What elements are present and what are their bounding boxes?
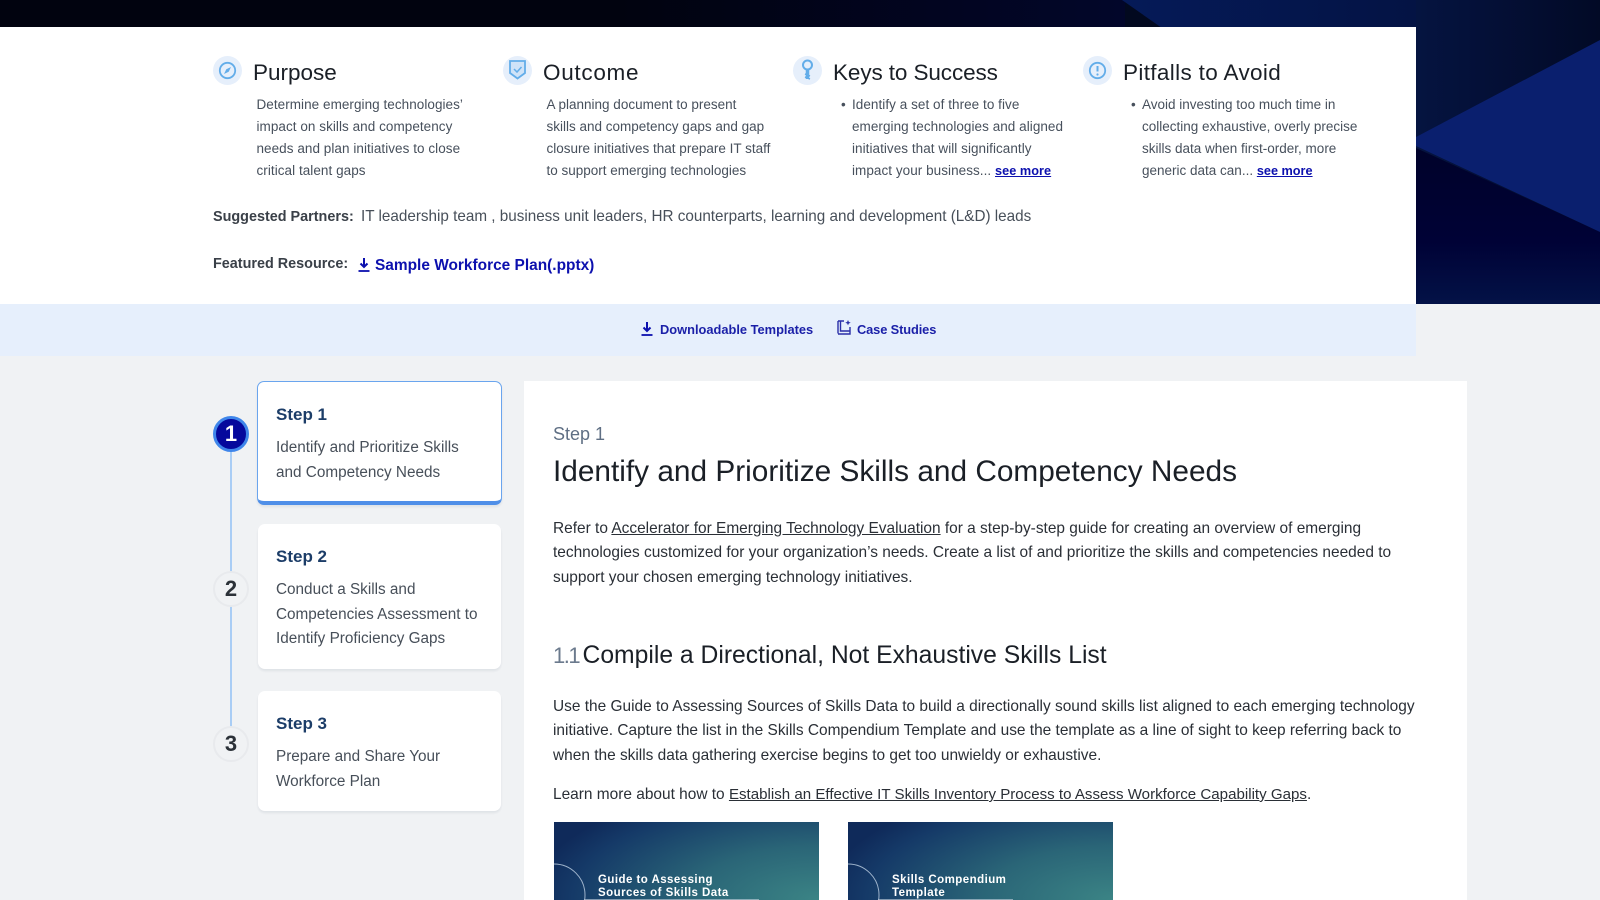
bullet text: Pitfalls to Avoid: skills data when first-order, more — [1142, 141, 1336, 156]
column: Pitfalls to Avoid: • — [1131, 97, 1136, 112]
icon: shield — [503, 56, 532, 85]
featured resource: Sample Workforce Plan(.pptx) — [375, 256, 594, 274]
subheading 1.1: Compile a Directional, Not Exhaustive Skills List — [582, 642, 1107, 668]
step number 3: 3 — [225, 731, 237, 756]
card: step 2 — [258, 524, 501, 669]
column: Keys to Success: • — [841, 97, 846, 112]
thumbnail title: Template — [892, 886, 945, 898]
step 2 description: Conduct a Skills and — [276, 581, 415, 598]
bullet text: Pitfalls to Avoid: collecting exhaustive, overly precise — [1142, 119, 1357, 134]
intro paragraph: technologies customized for your organization’s needs. Create a list of and prioritize the skills and competencies needed to — [553, 544, 1391, 561]
bullet text: Keys to Success: emerging technologies and aligned — [852, 119, 1063, 134]
heading: Purpose: Purpose — [253, 60, 337, 85]
featured resource — [213, 256, 594, 274]
icon: alert — [1083, 56, 1112, 85]
text: Outcome: to support emerging technologies — [546, 163, 746, 178]
step 2 label: Step 2 — [276, 547, 327, 566]
text: Outcome: closure initiatives that prepare IT staff — [546, 141, 770, 156]
intro paragraph: Refer to Accelerator for Emerging Technology Evaluation for a step-by-step guide for creating an overview of emerging — [553, 520, 1361, 536]
step number 1: 1 — [225, 421, 237, 446]
column: Pitfalls to Avoid — [1083, 56, 1357, 178]
text: Purpose: needs and plan initiatives to close — [256, 141, 460, 156]
thumbnail: Skills Compendium Template — [848, 822, 1113, 900]
action band — [0, 304, 1416, 356]
featured resource: Featured Resource: — [213, 256, 348, 272]
main title: Identify and Prioritize Skills and Competency Needs — [553, 455, 1237, 488]
text: Outcome — [546, 97, 770, 178]
heading: Outcome: Outcome — [543, 60, 639, 85]
step 1 description: and Competency Needs — [276, 464, 440, 481]
heading: Keys to Success: Keys to Success — [833, 60, 998, 85]
step 3 label: Step 3 — [276, 714, 327, 733]
link: Case Studies: Case Studies — [857, 322, 936, 337]
text: Outcome: skills and competency gaps and gap — [546, 119, 764, 134]
suggested partners: Suggested Partners: — [213, 209, 354, 225]
thumbnail title: Sources of Skills Data — [598, 886, 729, 898]
bullet text: Pitfalls to Avoid: generic data can... see more — [1142, 163, 1313, 178]
text: Purpose: impact on skills and competency — [256, 119, 452, 134]
body paragraph: when the skills data gathering exercise begins to get too unwieldy or exhaustive. — [553, 747, 1101, 764]
thumbnail: Guide to Assessing Sources of Skills Data — [554, 822, 819, 900]
text: Outcome: A planning document to present — [546, 97, 736, 112]
bullet text: Keys to Success: initiatives that will significantly — [852, 141, 1032, 156]
body paragraph: initiative. Capture the list in the Skills Compendium Template and use the template as a line of sight to keep referring back to — [553, 722, 1401, 739]
heading: Pitfalls to Avoid: Pitfalls to Avoid — [1123, 60, 1281, 85]
bullet text: Pitfalls to Avoid: Avoid investing too much time in — [1142, 97, 1335, 112]
step 3 description — [276, 748, 440, 790]
column: Outcome — [503, 56, 770, 178]
bullet text: Keys to Success: Identify a set of three to five — [852, 97, 1019, 112]
suggested partners: IT leadership team , business unit leaders, HR counterparts, learning and development (L&D) leads — [361, 208, 1031, 225]
step 2 description — [276, 581, 478, 647]
bullet text: Keys to Success — [841, 97, 1063, 178]
step number 2 — [213, 571, 249, 607]
icon: key — [793, 56, 822, 85]
body paragraph — [553, 698, 1415, 764]
card: step 3 — [258, 691, 501, 811]
header background — [0, 0, 1600, 304]
column: Purpose — [213, 56, 463, 178]
main content panel — [524, 381, 1467, 900]
thumbnail title — [598, 874, 729, 898]
step timeline — [230, 452, 232, 726]
step 2 description: Competencies Assessment to — [276, 606, 478, 623]
step 1 description — [276, 439, 459, 481]
column: Keys to Success — [793, 56, 1063, 178]
bullet text: Keys to Success: impact your business... see more — [852, 163, 1051, 178]
step 1 label: Step 1 — [276, 405, 327, 424]
step number 3 — [213, 726, 249, 762]
connector line — [230, 431, 232, 741]
bullet text: Pitfalls to Avoid — [1131, 97, 1357, 178]
link: Downloadable Templates: Downloadable Templates — [660, 322, 813, 337]
step 2 description: Identify Proficiency Gaps — [276, 630, 445, 647]
subheading 1.1: 1.1 — [553, 642, 579, 668]
step 1 description: Identify and Prioritize Skills — [276, 439, 459, 456]
step number 1 — [213, 416, 249, 452]
step eyebrow: Step 1 — [553, 424, 605, 444]
icon: compass — [213, 56, 242, 85]
text: Purpose: critical talent gaps — [256, 163, 366, 178]
step number 2: 2 — [225, 576, 237, 601]
thumbnail title: Guide to Assessing — [598, 874, 713, 886]
text: Purpose — [256, 97, 463, 178]
intro paragraph — [553, 520, 1391, 586]
step 3 description: Prepare and Share Your — [276, 748, 440, 765]
card: step 1 — [257, 381, 502, 505]
learn more line: Learn more about how to Establish an Effective IT Skills Inventory Process to Assess Workforce Capability Gaps. — [553, 786, 1311, 803]
body paragraph: Use the Guide to Assessing Sources of Skills Data to build a directionally sound skills list aligned to each emerging technology — [553, 698, 1415, 714]
step 3 description: Workforce Plan — [276, 773, 380, 790]
intro paragraph: support your chosen emerging technology initiatives. — [553, 569, 913, 586]
thumbnail title: Skills Compendium — [892, 874, 1006, 886]
top panel — [0, 27, 1416, 304]
thumbnail title — [892, 874, 1006, 898]
text: Purpose: Determine emerging technologies’ — [256, 97, 463, 112]
